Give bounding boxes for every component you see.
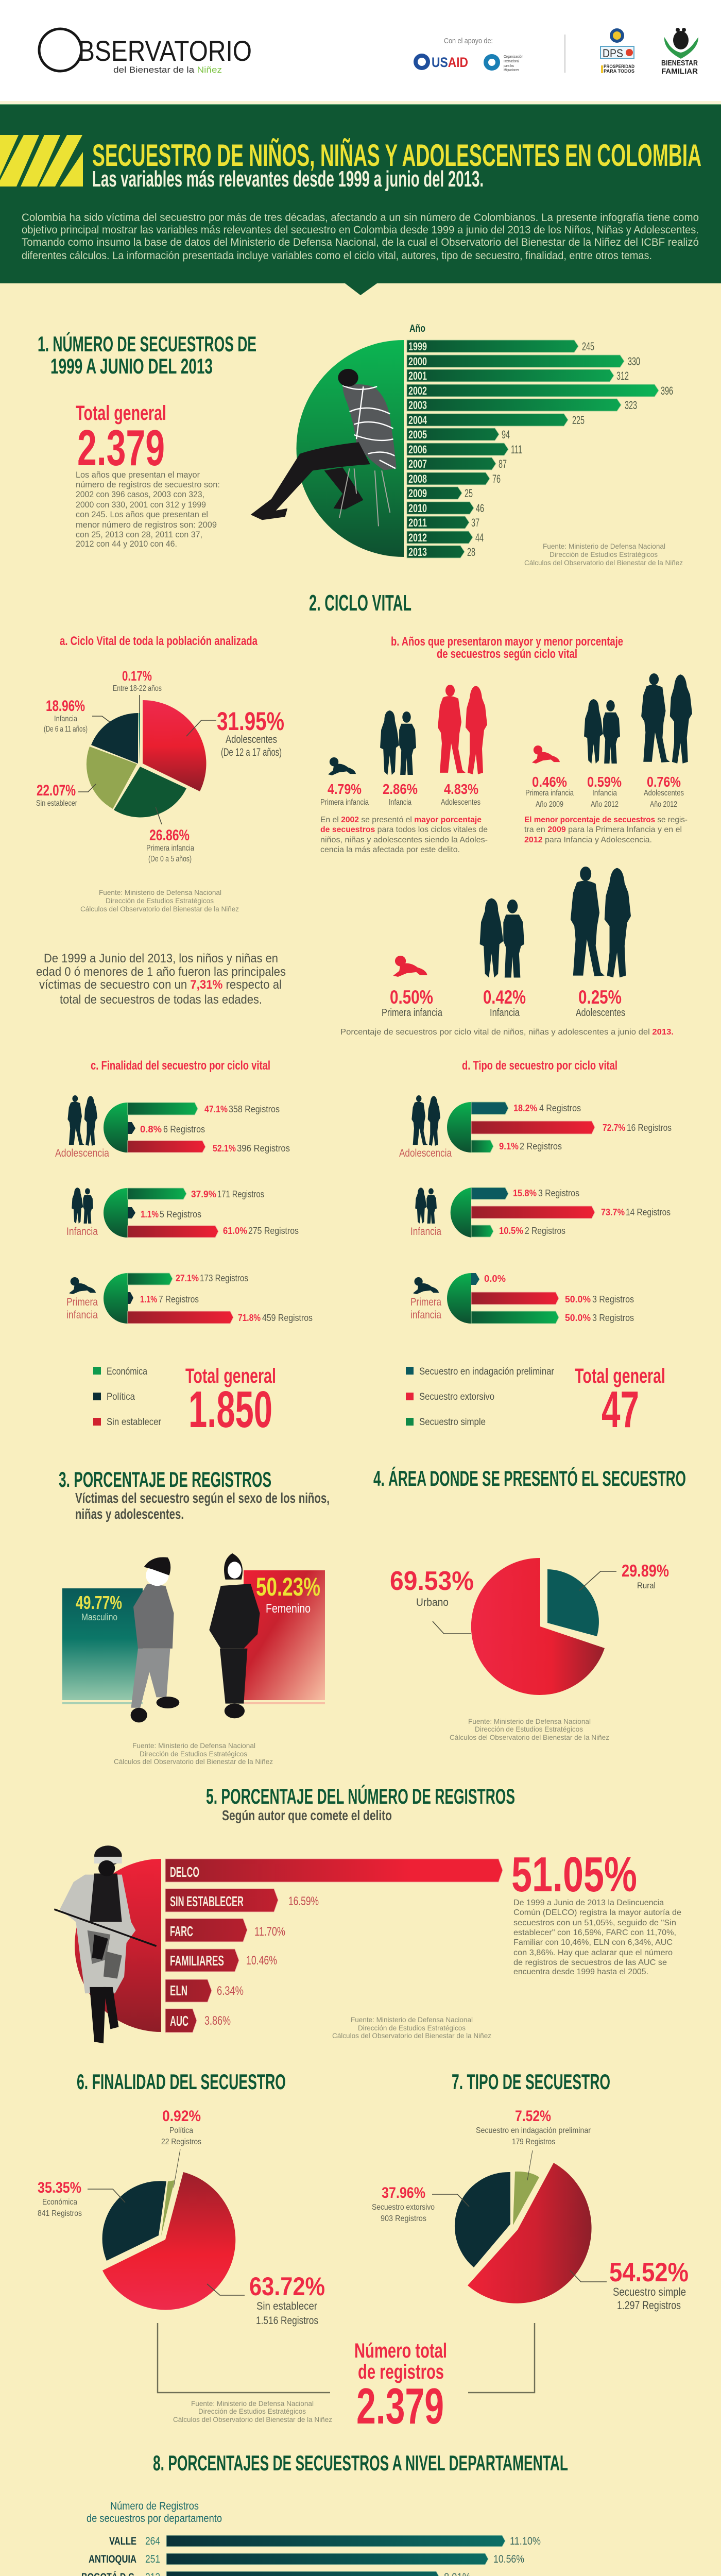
- partner logos: Migraciones: [504, 69, 519, 72]
- callout: 51.05%: Común (DELCO) registra la mayor autoría de: [513, 1908, 681, 1917]
- pie chart: ciclo vital: [36, 668, 284, 863]
- pie chart: área: [390, 1558, 669, 1695]
- pie chart: ciclo vital: 26.86%: [149, 827, 190, 844]
- c row: adolescencia: Adolescencia: [55, 1147, 109, 1159]
- pie chart: tipo: 54.52%: [609, 2258, 689, 2287]
- red half circle: [75, 1859, 161, 2032]
- bar chart: secuestros por año: 25: [465, 487, 473, 500]
- bar chart: secuestros por año: 2007: [408, 457, 427, 470]
- source note a: Dirección de Estudios Estratégicos: [106, 896, 214, 905]
- bar chart: secuestros por año: 1999: [408, 340, 427, 353]
- source note 1: Cálculos del Observatorio del Bienestar de la Niñez: [524, 558, 683, 567]
- d row: primera infancia: 50.0%: [565, 1313, 591, 1323]
- c row: infancia: 275 Registros: [248, 1226, 299, 1236]
- panel: menor porcentaje: Año 2012: [650, 800, 677, 809]
- pie chart: ciclo vital: 18.96%: [46, 698, 85, 715]
- legend d: [406, 1366, 555, 1428]
- bracket and total: [158, 2323, 535, 2434]
- panel: menor porcentaje: [524, 673, 692, 844]
- intro paragraph: objetivo principal mostrar las variables más relevantes del secuestro en Colombia desde 1999 a junio del 2013 de los Niños, Niñas y Adolescentes.: [22, 224, 699, 236]
- bar chart: secuestros por año: 225: [572, 414, 585, 427]
- panel: menor porcentaje: Año 2012: [591, 800, 619, 809]
- section 1 text: [76, 470, 220, 549]
- legend c: [93, 1366, 162, 1428]
- legend d: Secuestro extorsivo: [419, 1392, 494, 1402]
- pie chart: tipo: 37.96%: [382, 2184, 425, 2201]
- bar chart: departamentos: 251: [145, 2553, 160, 2565]
- pie chart: área: 69.53%: [390, 1566, 474, 1596]
- subheading d: d. Tipo de secuestro por ciclo vital: [462, 1059, 617, 1073]
- bar chart: secuestros por año: 87: [499, 457, 507, 470]
- partner logos: para las: [504, 64, 514, 68]
- d row: primera infancia: 3 Registros: [592, 1313, 634, 1323]
- panel d: tipo: [399, 1095, 672, 1324]
- d row: primera infancia: 0.0%: [484, 1274, 506, 1284]
- pie chart: tipo: [372, 2108, 689, 2312]
- pie chart: ciclo vital: (De 6 a 11 años): [44, 725, 88, 734]
- panel: menor porcentaje: Primera infancia: [525, 789, 574, 798]
- c row: adolescencia: [55, 1095, 290, 1159]
- legend c: Económica: [107, 1366, 147, 1377]
- panel: junio 2013: Porcentaje de secuestros por ciclo vital de niños, niñas y adolescentes a junio del 2013.: [340, 1028, 674, 1037]
- bar chart: autores: FARC: [170, 1923, 193, 1939]
- bar chart: autores: 10.46%: [246, 1954, 277, 1968]
- section 1 text: 2002 con 396 casos, 2003 con 323,: [76, 489, 204, 499]
- c row: infancia: 5 Registros: [160, 1209, 201, 1219]
- panel: junio 2013: 0.42%: [483, 987, 526, 1008]
- bar chart: secuestros por año: 2010: [408, 502, 427, 515]
- section 1 text: número de registros de secuestro son:: [76, 480, 220, 489]
- panel: mayor porcentaje 2002: Adolescentes: [441, 798, 480, 807]
- source note 5: Fuente: Ministerio de Defensa Nacional: [351, 2015, 473, 2024]
- panel: menor porcentaje: 0.46%: [532, 774, 567, 790]
- source note 4: Cálculos del Observatorio del Bienestar de la Niñez: [450, 1733, 609, 1741]
- callout: 7,31%: víctimas de secuestro con un 7,31% respecto al: [39, 978, 282, 992]
- partner logos: [414, 28, 698, 76]
- section 1 heading: 1999 A JUNIO DEL 2013: [50, 354, 213, 378]
- partner logos: Internacional: [504, 60, 519, 63]
- callout: 51.05%: de registros de secuestros de las AUC se: [513, 1958, 667, 1967]
- source note a: Fuente: Ministerio de Defensa Nacional: [99, 888, 221, 896]
- bar chart: autores: 3.86%: [204, 2014, 231, 2028]
- c row: primera infancia: [66, 1273, 313, 1324]
- bar chart: secuestros por año: 2001: [408, 369, 427, 382]
- panel: mayor porcentaje 2002: cencia la más afectada por este delito.: [320, 845, 460, 854]
- d row: adolescencia: 4 Registros: [539, 1103, 581, 1113]
- panel: mayor porcentaje 2002: [320, 685, 488, 854]
- source note a: Cálculos del Observatorio del Bienestar de la Niñez: [80, 905, 239, 913]
- section 5 heading: Según autor que comete el delito: [222, 1807, 392, 1823]
- section 5 heading: 5. PORCENTAJE DEL NÚMERO DE REGISTROS: [206, 1784, 515, 1808]
- c row: primera infancia: 459 Registros: [262, 1313, 313, 1323]
- pie chart: área: 29.89%: [622, 1561, 669, 1580]
- d row: primera infancia: Primera: [410, 1296, 441, 1308]
- pie chart: finalidad: 841 Registros: [38, 2209, 82, 2218]
- bar chart: departamentos: 10.56%: [493, 2553, 524, 2565]
- subheading a: a. Ciclo Vital de toda la población analizada: [60, 634, 258, 648]
- intro paragraph: diferentes cálculos. La información presentada incluye variables como el ciclo vital, autores, tipo de secuestro, finalidad, entre otros temas.: [22, 250, 652, 262]
- subtitle: Las variables más relevantes desde 1999 a junio del 2013.: [92, 166, 484, 192]
- section 1 text: 2000 con 330, 2001 con 312 y 1999: [76, 500, 206, 510]
- panel: sexo: [62, 1553, 325, 1722]
- c row: primera infancia: infancia: [66, 1309, 98, 1321]
- panel: menor porcentaje: El menor porcentaje de secuestros se regis-: [524, 816, 688, 824]
- source note 4: Dirección de Estudios Estratégicos: [475, 1725, 583, 1733]
- logo: Observatorio: [39, 29, 252, 75]
- d row: adolescencia: [399, 1095, 672, 1159]
- total c 1.850: 1.850: [188, 1381, 272, 1438]
- d row: adolescencia: 16 Registros: [627, 1123, 672, 1133]
- total d 47: [575, 1365, 665, 1438]
- d row: infancia: 2 Registros: [525, 1226, 565, 1236]
- chart caption: [87, 2500, 222, 2524]
- section 1 text: con 25, 2013 con 28, 2011 con 37,: [76, 530, 202, 539]
- section 7 heading: 7. TIPO DE SECUESTRO: [452, 2070, 610, 2094]
- pie chart: tipo: 1.297 Registros: [617, 2299, 681, 2312]
- d row: infancia: 14 Registros: [626, 1207, 671, 1217]
- d row: adolescencia: 2 Registros: [520, 1141, 562, 1151]
- bar chart: autores: DELCO: [170, 1864, 199, 1880]
- source note 4: [450, 1717, 609, 1741]
- pie chart: tipo: 7.52%: [515, 2108, 551, 2125]
- pie chart: tipo: Secuestro simple: [613, 2285, 686, 2298]
- section 1 text: Los años que presentan el mayor: [76, 470, 200, 480]
- c row: adolescencia: 358 Registros: [229, 1104, 280, 1114]
- c row: adolescencia: 52.1%: [213, 1143, 236, 1154]
- d row: primera infancia: 3 Registros: [592, 1294, 634, 1304]
- pie chart: finalidad: 0.92%: [162, 2108, 201, 2125]
- logo: Observatorio: del Bienestar de la Niñez: [113, 65, 222, 75]
- panel: mayor porcentaje 2002: Infancia: [389, 798, 411, 807]
- total c 1.850: Total general: [185, 1365, 276, 1387]
- pie chart: ciclo vital: 22.07%: [37, 782, 76, 799]
- subheading b: [391, 635, 623, 661]
- section 1 heading: [38, 331, 256, 378]
- bar chart: secuestros por año: [407, 323, 673, 558]
- bar chart: autores: ELN: [170, 1982, 187, 1998]
- panel: mayor porcentaje 2002: En el 2002 se presentó el mayor porcentaje: [320, 816, 482, 824]
- bar chart: secuestros por año: 2006: [408, 443, 427, 456]
- panel: sexo: Masculino: [81, 1612, 117, 1622]
- legend c: Sin establecer: [107, 1417, 162, 1428]
- pie chart: ciclo vital: 31.95%: [217, 707, 284, 736]
- c row: primera infancia: 1.1%: [140, 1294, 157, 1304]
- bar chart: secuestros por año: 2008: [408, 472, 427, 485]
- pie chart: finalidad: [38, 2108, 325, 2327]
- logo: Observatorio: BSERVATORIO: [78, 35, 252, 67]
- pie chart: finalidad: 22 Registros: [161, 2138, 201, 2146]
- c row: infancia: [66, 1188, 299, 1238]
- source note 1: [524, 542, 683, 567]
- bar chart: secuestros por año: 2009: [408, 487, 427, 500]
- bar chart: secuestros por año: 2000: [408, 355, 427, 368]
- bracket and total: de registros: [358, 2361, 444, 2383]
- pie chart: tipo: Secuestro extorsivo: [372, 2203, 435, 2212]
- d row: infancia: 15.8%: [513, 1188, 537, 1198]
- panel: junio 2013: [340, 867, 674, 1037]
- partner logos: Organización: [504, 55, 523, 59]
- panel: mayor porcentaje 2002: Primera infancia: [320, 798, 369, 807]
- bar chart: autores: FAMILIARES: [170, 1953, 224, 1969]
- c row: infancia: 171 Registros: [217, 1189, 264, 1199]
- c row: infancia: 37.9%: [191, 1189, 216, 1199]
- bar chart: secuestros por año: 44: [475, 531, 484, 544]
- callout: 51.05%: con 3,86%. Hay que aclarar que el número: [513, 1948, 673, 1957]
- d row: infancia: 73.7%: [601, 1207, 625, 1217]
- icon: armed fighter: [54, 1845, 157, 2043]
- callout: 7,31%: [36, 952, 286, 1007]
- total c 1.850: [185, 1365, 276, 1438]
- pie chart: ciclo vital: (De 12 a 17 años): [221, 747, 282, 758]
- bar chart: secuestros por año: 2003: [408, 399, 427, 412]
- panel: menor porcentaje: 0.76%: [647, 774, 681, 790]
- total general 2.379: Total general: [76, 402, 166, 425]
- partner logos: PARA TODOS: [604, 69, 634, 74]
- c row: primera infancia: 71.8%: [238, 1313, 261, 1323]
- callout: 51.05%: establecer" con 16,59%, FARC con 11,70%,: [513, 1928, 676, 1937]
- bar chart: autores: SIN ESTABLECER: [170, 1893, 244, 1909]
- bar chart: departamentos: 11.10%: [510, 2535, 541, 2547]
- bar chart: secuestros por año: 323: [625, 399, 637, 412]
- section 3 heading: 3. PORCENTAJE DE REGISTROS: [59, 1467, 271, 1492]
- partner logos: BIENESTAR: [661, 59, 698, 67]
- icon: girl: [209, 1553, 260, 1718]
- panel c: finalidad: [55, 1095, 313, 1324]
- bar chart: secuestros por año: 28: [467, 546, 475, 558]
- panel: menor porcentaje: tra en 2009 para la Primera Infancia y en el: [524, 825, 682, 834]
- d row: adolescencia: 72.7%: [603, 1123, 625, 1133]
- callout: 51.05%: encuentra desde 1999 hasta el 2005.: [513, 1968, 648, 1976]
- bar chart: secuestros por año: 2011: [408, 516, 427, 529]
- d row: primera infancia: [410, 1273, 634, 1324]
- total d 47: Total general: [575, 1365, 665, 1387]
- pie chart: ciclo vital: (De 0 a 5 años): [148, 855, 192, 863]
- bar chart: secuestros por año: 2012: [408, 531, 427, 544]
- bar chart: autores: [165, 1859, 503, 2032]
- panel: sexo: 50.23%: [256, 1572, 320, 1601]
- bar chart: secuestros por año: 330: [628, 355, 640, 368]
- callout: 51.05%: [511, 1847, 681, 1976]
- panel: menor porcentaje: Adolescentes: [644, 789, 684, 798]
- source note 6-7: Fuente: Ministerio de Defensa Nacional: [191, 2399, 314, 2408]
- bar chart: secuestros por año: 2005: [408, 428, 427, 441]
- panel: mayor porcentaje 2002: 4.79%: [328, 781, 362, 797]
- d row: infancia: 3 Registros: [538, 1188, 579, 1198]
- bar chart: secuestros por año: Año: [409, 323, 425, 334]
- source note 3: Fuente: Ministerio de Defensa Nacional: [132, 1741, 255, 1750]
- bar chart: autores: 16.59%: [288, 1894, 319, 1908]
- source note 6-7: Cálculos del Observatorio del Bienestar de la Niñez: [173, 2415, 332, 2424]
- source note 1: Fuente: Ministerio de Defensa Nacional: [543, 542, 665, 550]
- source note 5: [332, 2015, 491, 2040]
- pie chart: tipo: Secuestro en indagación preliminar: [476, 2126, 591, 2135]
- source note 4: Fuente: Ministerio de Defensa Nacional: [468, 1717, 591, 1725]
- source note a: [80, 888, 239, 913]
- c row: adolescencia: 0.8%: [140, 1124, 162, 1134]
- c row: infancia: Infancia: [66, 1226, 98, 1238]
- subheading b: de secuestros según ciclo vital: [437, 647, 577, 661]
- bar chart: autores: 11.70%: [254, 1925, 285, 1939]
- bar chart: autores: AUC: [170, 2013, 188, 2029]
- section 6 heading: 6. FINALIDAD DEL SECUESTRO: [77, 2070, 286, 2094]
- panel: mayor porcentaje 2002: de secuestros para todos los ciclos vitales de: [320, 825, 488, 834]
- panel: menor porcentaje: 2012 para Infancia y Adolescencia.: [524, 836, 652, 844]
- pie chart: finalidad: 35.35%: [38, 2179, 81, 2196]
- total general 2.379: [76, 402, 166, 476]
- c row: primera infancia: Primera: [66, 1296, 98, 1308]
- partner logos: Con el apoyo de:: [444, 37, 493, 45]
- callout: 51.05%: 51.05%: [511, 1847, 637, 1902]
- source note 3: Cálculos del Observatorio del Bienestar de la Niñez: [114, 1757, 273, 1766]
- panel: mayor porcentaje 2002: niños, niñas y adolescentes siendo la Adoles-: [320, 836, 488, 844]
- intro paragraph: [22, 212, 699, 262]
- panel: junio 2013: Adolescentes: [576, 1007, 625, 1019]
- bar chart: secuestros por año: 2013: [408, 546, 427, 558]
- pie chart: finalidad: 1.516 Registros: [256, 2315, 318, 2327]
- total general 2.379: 2.379: [77, 419, 165, 476]
- d row: infancia: [410, 1188, 671, 1238]
- source note 3: [114, 1741, 273, 1766]
- icon: bound seated person: [251, 369, 397, 526]
- callout: 7,31%: edad 0 ó menores de 1 año fueron las principales: [36, 965, 286, 979]
- panel: junio 2013: Infancia: [490, 1007, 520, 1019]
- bracket and total: Número total: [354, 2340, 447, 2362]
- pie chart: ciclo vital: Sin establecer: [36, 799, 78, 808]
- bar chart: secuestros por año: 46: [476, 502, 484, 515]
- bar chart: departamentos: 264: [145, 2535, 160, 2547]
- panel: menor porcentaje: Infancia: [592, 789, 617, 798]
- legend d: Secuestro simple: [419, 1417, 486, 1428]
- source note 5: Dirección de Estudios Estratégicos: [358, 2024, 466, 2032]
- source note 1: Dirección de Estudios Estratégicos: [550, 550, 658, 558]
- partner logos: PROSPERIDAD: [604, 64, 634, 69]
- section 3 heading: [59, 1467, 330, 1522]
- section 1 text: 2012 con 44 y 2010 con 46.: [76, 539, 177, 549]
- chart caption: de secuestros por departamento: [87, 2513, 222, 2524]
- section 2 heading: 2. CICLO VITAL: [309, 590, 411, 616]
- icon: boy: [131, 1557, 179, 1722]
- pie chart: ciclo vital: Primera infancia: [146, 844, 194, 853]
- bar chart: departamentos: VALLE: [109, 2535, 136, 2547]
- section 1 text: con 245. Los años que presentan el: [76, 510, 208, 519]
- c row: primera infancia: 27.1%: [176, 1273, 199, 1283]
- green half circle: [297, 340, 404, 557]
- c row: infancia: 61.0%: [223, 1226, 247, 1236]
- panel: sexo: 49.77%: [76, 1592, 122, 1613]
- partner logos: DPS: [603, 47, 623, 60]
- total d 47: 47: [602, 1381, 639, 1438]
- c row: adolescencia: 396 Registros: [237, 1143, 290, 1154]
- source note 6-7: [173, 2399, 332, 2424]
- bar chart: secuestros por año: 396: [661, 384, 673, 397]
- pie chart: finalidad: Económica: [42, 2198, 77, 2207]
- pie chart: ciclo vital: Adolescentes: [226, 734, 277, 745]
- pie chart: área: Rural: [637, 1581, 656, 1590]
- pie chart: ciclo vital: Infancia: [54, 715, 77, 723]
- section 3 heading: niñas y adolescentes.: [75, 1506, 184, 1522]
- partner logos: USAID: [432, 55, 468, 70]
- panel: menor porcentaje: 0.59%: [587, 774, 622, 790]
- chart caption: Número de Registros: [110, 2500, 199, 2512]
- c row: primera infancia: 7 Registros: [159, 1294, 199, 1304]
- section 3 heading: Víctimas del secuestro según el sexo de los niños,: [75, 1490, 330, 1506]
- section 1 text: menor número de registros son: 2009: [76, 520, 217, 530]
- c row: adolescencia: 47.1%: [204, 1104, 228, 1114]
- panel: junio 2013: 0.50%: [390, 987, 433, 1008]
- stripes icon: [0, 135, 83, 187]
- d row: infancia: 10.5%: [499, 1226, 523, 1236]
- pie chart: ciclo vital: Entre 18-22 años: [113, 684, 162, 693]
- bar chart: secuestros por año: 111: [511, 443, 522, 456]
- source note 3: Dirección de Estudios Estratégicos: [140, 1750, 247, 1758]
- section 5 heading: [206, 1784, 515, 1823]
- callout: 51.05%: Familiar con 10,46%, ELN con 6,34%, AUC: [513, 1938, 673, 1947]
- subheading c: c. Finalidad del secuestro por ciclo vital: [91, 1059, 270, 1073]
- intro paragraph: Colombia ha sido víctima del secuestro por más de tres décadas, afectando a un sin número de Colombianos. La presente infografía tiene como: [22, 212, 699, 224]
- callout: 51.05%: De 1999 a Junio de 2013 la Delincuencia: [513, 1899, 664, 1907]
- callout: 51.05%: secuestros con un 51,05%, seguido de "Sin: [513, 1919, 676, 1927]
- panel: sexo: Femenino: [266, 1602, 311, 1616]
- white top band: [0, 0, 721, 101]
- d row: primera infancia: 50.0%: [565, 1294, 591, 1304]
- pie chart: finalidad: 63.72%: [249, 2272, 325, 2301]
- callout: 7,31%: total de secuestros de todas las edades.: [60, 993, 262, 1007]
- callout: 7,31%: De 1999 a Junio del 2013, los niños y niñas en: [44, 952, 278, 965]
- section 1 heading: 1. NÚMERO DE SECUESTROS DE: [38, 331, 256, 356]
- d row: adolescencia: 18.2%: [513, 1103, 537, 1113]
- source note 6-7: Dirección de Estudios Estratégicos: [198, 2407, 306, 2415]
- pie chart: tipo: 179 Registros: [512, 2138, 555, 2146]
- intro paragraph: Tomando como insumo la base de datos del Ministerio de Defensa Nacional, de la cual el Observatorio del Bienestar de la Niñez del ICBF realizó: [22, 236, 699, 248]
- bar chart: secuestros por año: 94: [502, 428, 510, 441]
- pie chart: área: Urbano: [416, 1597, 449, 1608]
- bar chart: autores: 6.34%: [217, 1984, 244, 1998]
- c row: infancia: 1.1%: [141, 1209, 159, 1219]
- pie chart: finalidad: Sin establecer: [256, 2300, 317, 2312]
- legend d: Secuestro en indagación preliminar: [419, 1366, 555, 1377]
- d row: adolescencia: 9.1%: [499, 1141, 519, 1151]
- panel: junio 2013: 0.25%: [578, 987, 622, 1008]
- d row: infancia: Infancia: [410, 1226, 441, 1238]
- pie chart: ciclo vital: 0.17%: [122, 668, 152, 684]
- legend c: Política: [107, 1392, 135, 1402]
- bar chart: departamentos: ANTIOQUIA: [89, 2553, 136, 2565]
- bar chart: departamentos: [38, 2535, 541, 2576]
- panel: menor porcentaje: Año 2009: [536, 800, 563, 809]
- bar chart: secuestros por año: 2004: [408, 414, 427, 427]
- pie chart: finalidad: Política: [169, 2126, 193, 2135]
- header banner: [0, 101, 721, 295]
- bar chart: secuestros por año: 37: [471, 516, 479, 529]
- c row: adolescencia: 6 Registros: [163, 1124, 205, 1134]
- d row: primera infancia: infancia: [410, 1309, 441, 1321]
- panel: mayor porcentaje 2002: 4.83%: [444, 781, 478, 797]
- source note 5: Cálculos del Observatorio del Bienestar de la Niñez: [332, 2031, 491, 2040]
- d row: adolescencia: Adolescencia: [399, 1147, 452, 1159]
- bar chart: secuestros por año: 245: [582, 340, 594, 353]
- bar chart: secuestros por año: 312: [616, 369, 629, 382]
- panel: mayor porcentaje 2002: 2.86%: [383, 781, 418, 797]
- partner logos: FAMILIAR: [661, 67, 698, 76]
- pie chart: tipo: 903 Registros: [381, 2214, 426, 2223]
- bar chart: secuestros por año: 2002: [408, 384, 427, 397]
- subheading b: b. Años que presentaron mayor y menor porcentaje: [391, 635, 623, 649]
- panel: junio 2013: Primera infancia: [382, 1007, 443, 1019]
- bracket and total: 2.379: [356, 2378, 444, 2434]
- bar chart: secuestros por año: 76: [492, 472, 501, 485]
- c row: primera infancia: 173 Registros: [200, 1273, 248, 1283]
